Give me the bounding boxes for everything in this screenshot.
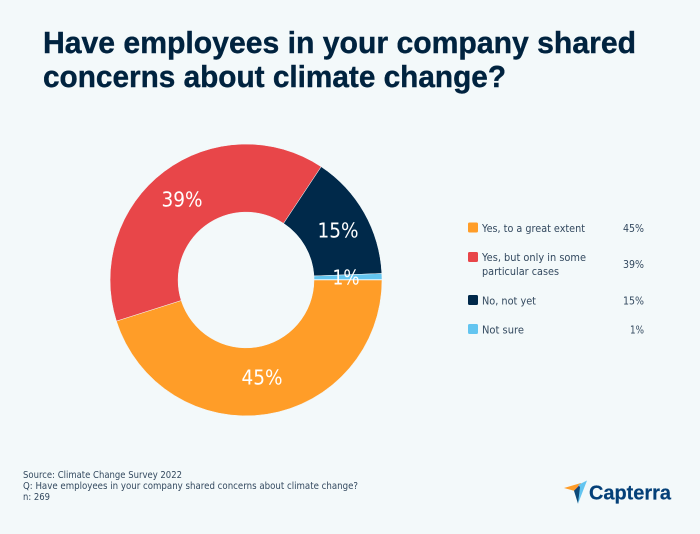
legend item: yes, but only in some particular cases: 39%: [623, 259, 644, 271]
legend item: no, not yet: 15%: [623, 296, 644, 308]
title: concerns about climate change?: [43, 60, 506, 94]
legend item: yes, but only in some particular cases: [468, 252, 644, 278]
value labels: 15%: [318, 218, 358, 242]
value labels: 39%: [162, 188, 202, 212]
legend item: no, not yet: [468, 295, 644, 308]
legend item: not sure: [468, 324, 644, 336]
icon: Capterra arrow: [564, 480, 587, 504]
title: [43, 26, 636, 94]
legend item: yes, to a great extent: Yes, to a great extent: [481, 223, 585, 235]
legend item: not sure: Not sure: [482, 324, 524, 336]
legend item: yes, but only in some particular cases: Yes, but only in some: [481, 252, 586, 264]
segment: no, not yet: [284, 167, 382, 276]
source note: [23, 470, 358, 503]
source note: Source: Climate Change Survey 2022: [23, 470, 182, 481]
value labels: 1%: [332, 266, 360, 290]
segment: not sure: [314, 274, 382, 280]
source note: n: 269: [23, 492, 50, 503]
legend item: yes, to a great extent: [468, 222, 644, 235]
wordmark: Capterra: [589, 482, 672, 504]
title: Have employees in your company shared: [43, 26, 636, 60]
segment: yes, but only in some particular cases: [110, 144, 321, 321]
source note: Q: Have employees in your company shared concerns about climate change?: [23, 481, 358, 492]
donut chart: [110, 144, 382, 416]
Capterra logo: [564, 480, 672, 504]
value labels: 45%: [242, 366, 282, 390]
legend item: yes, but only in some particular cases: particular cases: [482, 266, 559, 278]
legend item: no, not yet: No, not yet: [482, 296, 536, 308]
value labels: [162, 188, 360, 390]
segment: yes, to a great extent: [116, 280, 382, 416]
legend item: yes, to a great extent: 45%: [623, 223, 644, 235]
legend: [468, 222, 644, 336]
legend item: not sure: 1%: [630, 324, 644, 336]
